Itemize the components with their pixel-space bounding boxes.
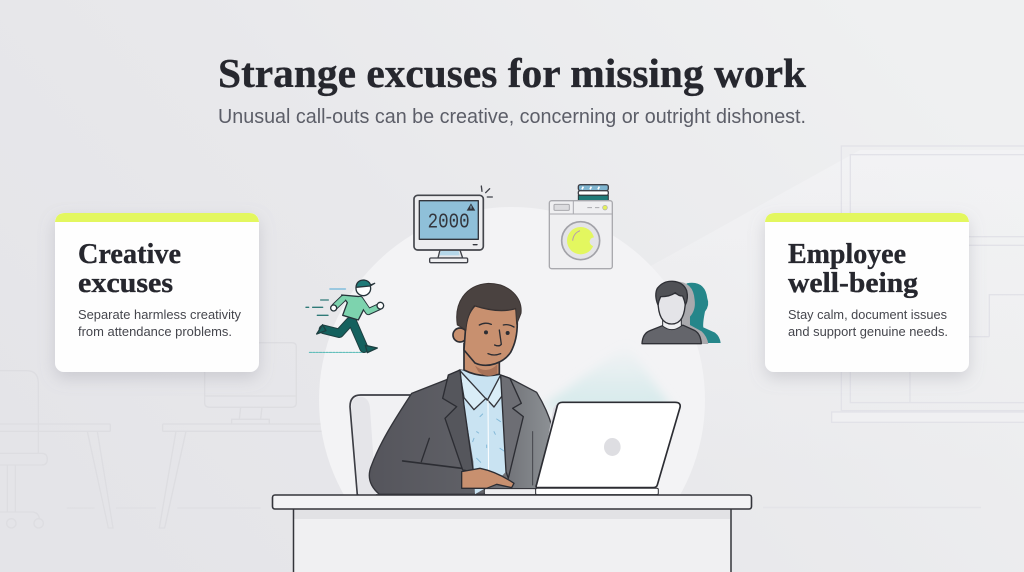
heading: creative excuses: excuses (78, 268, 173, 299)
text: creative excuses description: from attendance problems. (78, 324, 232, 339)
background: faint floor line (763, 506, 981, 508)
icon: computer showing 2000 (414, 186, 492, 263)
text: creative excuses description (78, 307, 241, 339)
heading: employee well-being: Employee (788, 239, 906, 270)
icon: person with shadow duplicates (642, 281, 721, 344)
panel: employee well-being (765, 213, 969, 372)
text: creative excuses description: Separate harmless creativity (78, 307, 241, 322)
background: faint desk, chair and monitor (0, 343, 349, 528)
heading: creative excuses: Creative (78, 239, 181, 270)
label: screen reading 2000: 2000 (428, 211, 470, 235)
heading: creative excuses (78, 239, 181, 299)
icon: runner (306, 280, 384, 353)
text: employee well-being description (788, 307, 948, 339)
background: faint office window (832, 146, 1024, 422)
heading: employee well-being (788, 239, 918, 299)
icon: washing machine (549, 185, 612, 269)
head (453, 283, 521, 376)
title: Strange excuses for missing work (218, 50, 806, 96)
subtitle: Unusual call-outs can be creative, concerning or outright dishonest. (218, 106, 806, 128)
shirt (459, 370, 506, 494)
central white circle (319, 207, 705, 572)
jacket (369, 370, 552, 494)
illustration: man working at laptop (350, 283, 680, 495)
hand (462, 468, 514, 488)
text: employee well-being description: Stay calm, document issues (788, 307, 947, 322)
panel: creative excuses (55, 213, 259, 372)
laptop (484, 402, 680, 495)
runner torso and arms (335, 295, 379, 320)
chair (350, 395, 417, 495)
text: employee well-being description: and support genuine needs. (788, 324, 948, 339)
desk (272, 495, 752, 572)
heading: employee well-being: well-being (788, 268, 918, 299)
runner legs (317, 320, 377, 353)
lapels (443, 370, 523, 478)
